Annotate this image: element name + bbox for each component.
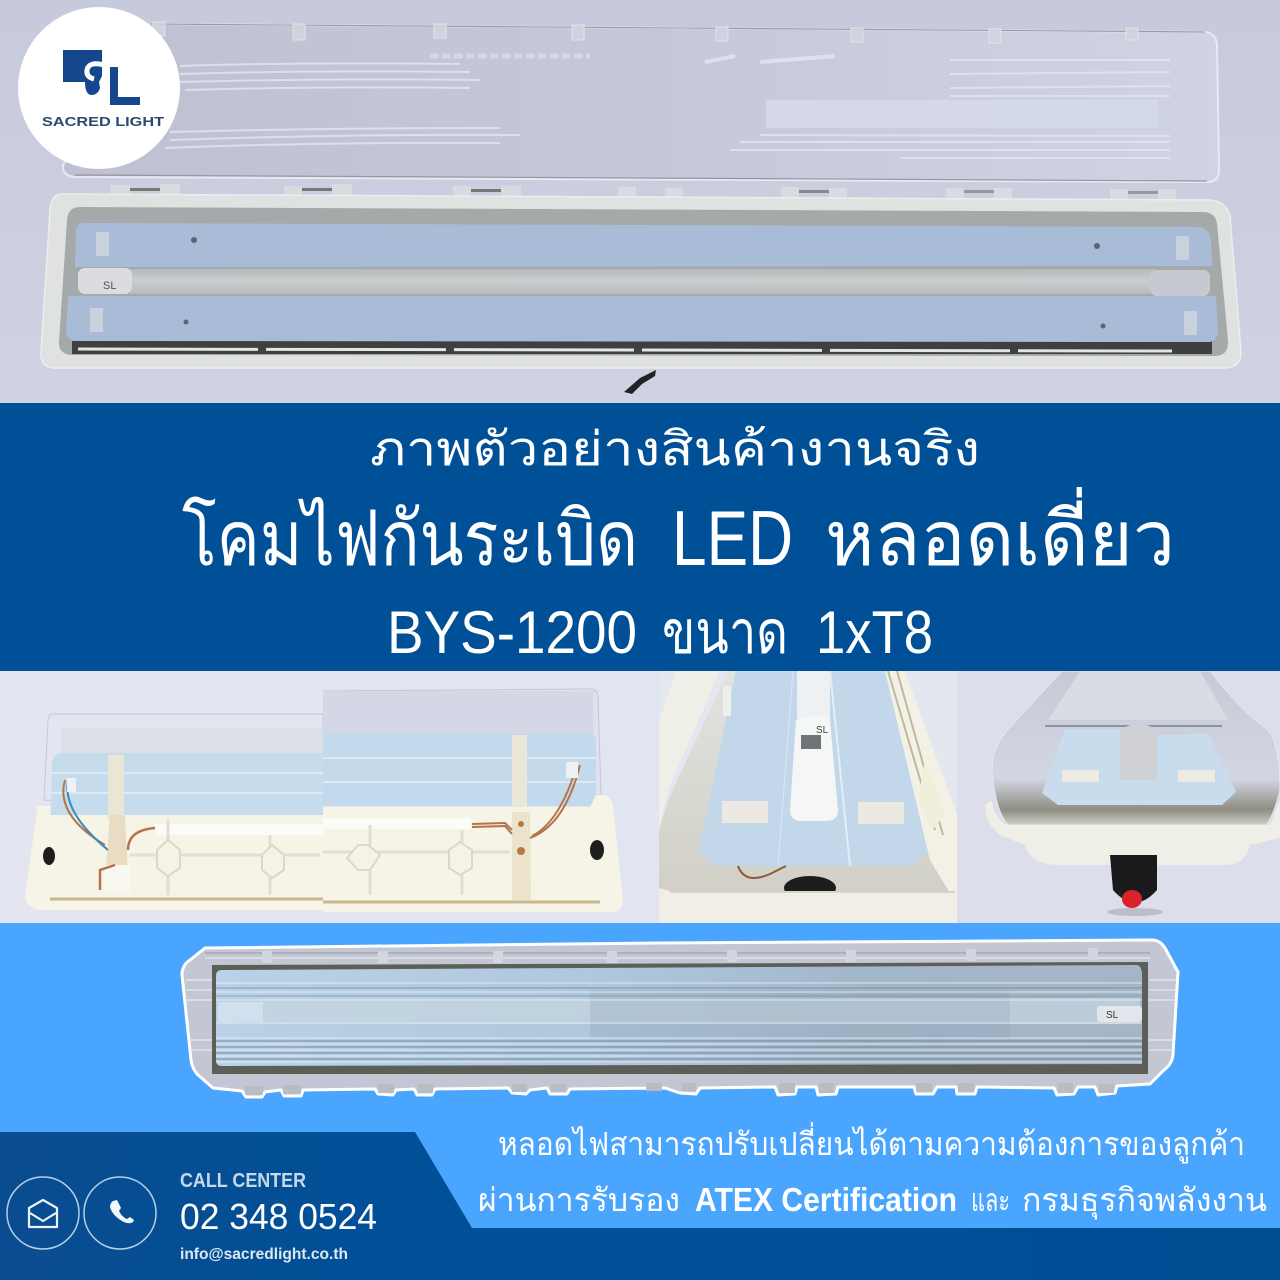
model and size: ขนาด bbox=[662, 599, 788, 666]
heading line 2: หลอดเดี่ยว bbox=[825, 487, 1175, 582]
bottom section background bbox=[0, 923, 1280, 1280]
heading line 2 bbox=[182, 487, 1175, 582]
photo: tube end close-up: SL bbox=[816, 725, 829, 736]
photo: wiring left end bbox=[0, 671, 323, 923]
lamp housing tray bbox=[41, 194, 1241, 368]
heading line 2: LED bbox=[672, 494, 793, 582]
model and size bbox=[387, 599, 933, 666]
feature text line 2: ผ่านการรับรอง bbox=[478, 1182, 680, 1218]
logo wordmark: SACRED LIGHT bbox=[42, 115, 164, 129]
model and size: 1xT8 bbox=[816, 599, 933, 666]
logo mark SL bbox=[63, 50, 140, 105]
dark inner seam bbox=[212, 962, 1148, 1074]
feature text line 2: กรมธุรกิจพลังงาน bbox=[1022, 1182, 1267, 1220]
reflector and ribbed cover bbox=[216, 965, 1142, 1066]
feature text line 2: ATEX Certification bbox=[695, 1181, 957, 1218]
icon: email bbox=[7, 1177, 79, 1249]
heading line 1: ภาพตัวอย่างสินค้างานจริง bbox=[370, 422, 980, 475]
hinges bbox=[110, 184, 1176, 201]
feature text line 1: หลอดไฟสามารถปรับเปลี่ยนได้ตามความต้องการของลูกค้า bbox=[498, 1122, 1245, 1164]
fluorescent tube: SL bbox=[103, 280, 116, 292]
footer contact panel bbox=[0, 1132, 1280, 1280]
photo: tube end close-up bbox=[659, 671, 957, 923]
tray interior bbox=[59, 207, 1228, 356]
reflector plate lower bbox=[66, 296, 1218, 342]
photo: opened lamp, top view bbox=[0, 0, 1280, 403]
call center label: CALL CENTER bbox=[180, 1170, 306, 1192]
tube glow bbox=[260, 998, 1140, 1024]
phone number: 02 348 0524 bbox=[180, 1196, 377, 1237]
cable gland bbox=[624, 370, 656, 394]
photo: wiring right end bbox=[323, 671, 659, 923]
icon: phone bbox=[84, 1177, 156, 1249]
product: closed lamp: SL bbox=[1106, 1010, 1119, 1021]
lamp clear cover bbox=[63, 22, 1219, 182]
email address: info@sacredlight.co.th bbox=[180, 1246, 348, 1263]
model and size: BYS-1200 bbox=[387, 599, 637, 666]
feature text line 2 bbox=[478, 1181, 1267, 1220]
fluorescent tube bbox=[78, 268, 1210, 296]
product: closed lamp bbox=[182, 940, 1178, 1097]
title banner bbox=[0, 403, 1280, 671]
cover ribs bbox=[216, 983, 1142, 1062]
feature text line 2: และ bbox=[971, 1182, 1010, 1218]
logo badge bbox=[18, 7, 180, 169]
hinge tabs bbox=[245, 1083, 1114, 1095]
heading line 2: โคมไฟกันระเบิด bbox=[182, 496, 638, 582]
rim ribs and clips bbox=[186, 948, 1176, 1050]
mounting pads bbox=[90, 232, 1197, 335]
reflector plate bbox=[699, 671, 928, 866]
photo: lamp front end with gland bbox=[957, 671, 1280, 923]
reflector plate upper bbox=[75, 223, 1212, 267]
